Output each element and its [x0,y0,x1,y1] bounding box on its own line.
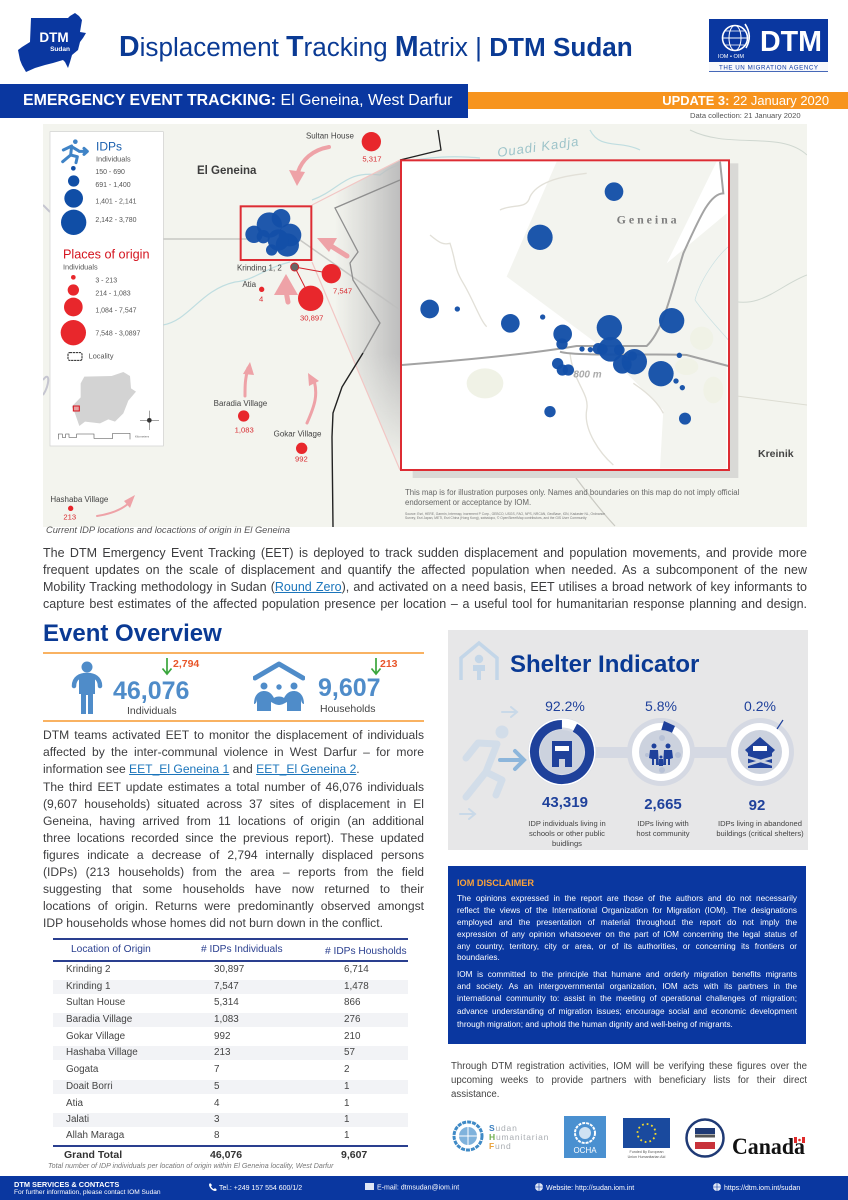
disclaimer text: advance understanding of migration issues; encourage social and economic development [457,1007,797,1016]
event overview body text: affected by the inter-communal violence in West Darfur – for more [43,745,424,759]
gauge: schools and public buildings [525,698,606,848]
table: location of origin [48,938,408,1170]
origin site markers: 992 [295,455,308,464]
gauge: host community: IDPs living with [637,819,689,828]
gauge: schools and public buildings: buidlings [552,839,582,848]
cluster of IDP sites with locator box [241,206,311,260]
figure: individuals: 46,076 [113,677,189,705]
table: location of origin: 4 [214,1098,220,1109]
event overview key figures: Individuals [127,705,177,717]
icon: household [253,662,305,711]
blue event banner [0,84,468,118]
event overview body text: DTM teams activated EET to monitor the displacement of individuals [43,728,424,742]
table: location of origin: Jalati [66,1114,89,1125]
logo: DTM Sudan country shape: Sudan [50,46,70,53]
footer DTM site: https://dtm.iom.int/sudan [724,1185,800,1192]
legend box: Kilometers [135,434,150,438]
gauge: host community: 5.8% [645,698,677,714]
closing note [451,1061,807,1100]
table: location of origin: # IDPs Individuals [201,944,283,955]
partner logos [452,1116,805,1159]
footer email: E-mail: dtmsudan@iom.int [377,1184,459,1192]
disclaimer text: international community to: assist in the meeting of operational challenges of migration; [457,994,797,1003]
table: location of origin: Grand Total [64,1149,122,1161]
logo: USAID seal [686,1120,724,1156]
footer telephone: Tel.: +249 157 554 600/1/2 [219,1185,302,1192]
logo: Canada wordmark: Canada [732,1134,805,1159]
table: location of origin: 213 [214,1047,230,1058]
map label: El Geneina: El Geneina [197,165,257,177]
map source credit: Survey, Esri Japan, METI, Esri China (Hong Kong), swisstopo, © OpenStreetMap contributors, and the GIS User Community [405,516,587,520]
table: location of origin: 1 [344,1114,350,1125]
legend box: 2,142 - 3,780 [95,217,137,224]
origin site markers: Atia [242,280,257,289]
legend box: 214 - 1,083 [95,291,131,298]
event overview body text: The third EET update estimates a total number of 46,076 individuals [43,780,424,794]
intro paragraph: capture best estimates of the affected population presence per location – a useful tool for humanitarian response planning and design. [43,597,807,611]
gauge: abandoned buildings [716,698,804,838]
locality boundary road [335,180,400,353]
legend box: IDPs [96,140,122,154]
intro paragraph: frequent updates on the scale of displacement and quantify the affected population when needed. As a subcomponent of the new [43,563,807,577]
event overview body text [43,728,424,930]
map source credit: Source: Esri, HERE, Garmin, Intermap, increment P Corp., GEBCO, USGS, FAO, NPS, NRCAN, GeoBase, IGN, Kadaster NL, Ordnance [405,512,605,516]
table: location of origin: Krinding 1 [66,981,110,992]
gauge: host community: host community [636,829,690,838]
icon: person [72,662,102,714]
table: location of origin: 5,314 [214,997,239,1008]
legend box: 1,401 - 2,141 [95,199,137,206]
icon: runner [63,139,87,163]
origin site markers: Gokar Village [274,430,322,439]
table: location of origin: 6,714 [344,964,369,975]
gauge: schools and public buildings: IDP individuals living in [528,819,606,828]
event overview body text: figures indicate a decrease of 2,794 internally displaced persons [43,848,424,862]
gauge: abandoned buildings: IDPs living in abandoned [718,819,802,828]
label: river Ouadi Kadja: Ouadi Kadja [496,134,580,160]
table: location of origin: 1 [344,1081,350,1092]
origin site markers: Hashaba Village [50,495,109,504]
footer contacts title: DTM SERVICES & CONTACTS [14,1180,119,1189]
legend box: 1,084 - 7,547 [95,308,137,315]
origin site markers: Sultan House [306,132,354,141]
table: location of origin: 210 [344,1031,360,1042]
origin site markers: 30,897 [300,314,323,323]
table: location of origin: Sultan House [66,997,125,1008]
event overview body text: suggesting that some households have now returned to their [43,882,424,896]
footer bar: For further information, please contact IOM Sudan [14,1189,161,1196]
table: location of origin: Gogata [66,1064,98,1075]
logo: IOM DTM: DTM [760,26,822,58]
origin site markers: Krinding 1, 2 [237,264,282,273]
footer website: Website: http://sudan.iom.int [546,1185,634,1192]
table: location of origin: 57 [344,1047,355,1058]
map disclaimer [405,488,740,507]
disclaimer text: boundaries. [457,953,500,962]
table: location of origin: 2 [344,1064,350,1075]
logo: IOM DTM: IOM • OIM [718,54,744,60]
closing note: upcoming weeks to provide partners with beneficiary lists for their direct [451,1075,807,1086]
legend box: Individuals [96,154,131,163]
logo: IOM DTM: THE UN MIGRATION AGENCY [719,64,818,72]
logo: Sudan Humanitarian Fund [454,1122,549,1151]
origin site markers: 1,083 [235,426,254,435]
orange update bar [468,92,848,109]
IDP site bubbles [420,182,691,425]
icon: down arrow [370,658,382,676]
origin site markers: 213 [63,512,76,521]
inset map: 800 m [573,370,602,381]
table: location of origin: 1,478 [344,981,369,992]
table: location of origin: Location of Origin [71,944,151,955]
change: households: 213 [380,658,398,670]
event overview body text: Geneina, having arrived from 11 locations of origin (an additional [43,814,424,828]
figure: households: 9,607 [318,674,381,702]
gauge: abandoned buildings: buildings (critical shelters) [716,829,804,838]
title: Displacement Tracking Matrix | DTM Sudan [119,31,633,63]
legend box: 7,548 - 3,0897 [95,330,140,337]
logo: DTM Sudan country shape [18,13,86,72]
event overview body text: locations of origin. Returns were predominantly observed amongst [43,899,424,913]
logo: Sudan Humanitarian Fund: Fund [489,1141,512,1151]
map base terrain [43,124,807,527]
table: location of origin: 5 [214,1081,220,1092]
logo: OCHA: OCHA [573,1146,597,1155]
footer bar [0,1176,848,1200]
table: location of origin: 1 [344,1130,350,1141]
table: location of origin: # IDPs Housholds [325,946,407,957]
disclaimer text: through migration; and uphold the human dignity and well-being of migrants. [457,1020,733,1029]
table: location of origin: 3 [214,1114,220,1125]
logo: EU humanitarian aid: Funded By European [630,1150,663,1154]
table: location of origin: 9,607 [341,1149,367,1161]
event overview body text: (9,607 households) situated across 37 sites of displacement in El [43,797,424,811]
origin site markers: 5,317 [362,155,382,164]
table: location of origin: Doait Borri [66,1081,113,1092]
logo: EU humanitarian aid: Union Humanitarian Aid [628,1155,665,1159]
event overview key figures: Households [320,703,375,715]
disclaimer text: employed and the presentation of material throughout the report do not imply the [457,918,797,927]
map panel [43,124,807,527]
map disclaimer: This map is for illustration purposes only. Names and boundaries on this map do not imply official [405,488,740,497]
gauge: schools and public buildings: 92.2% [545,698,585,714]
table: location of origin: 8 [214,1130,220,1141]
legend box: Places of origin [63,247,150,261]
table: location of origin: 46,076 [210,1149,242,1161]
footer website [535,1183,634,1192]
table: location of origin: Total number of IDP individuals per location of origin within El Geneina locality, West Darfur [48,1162,333,1170]
origin site markers [50,132,382,521]
disclaimer text: expression of any opinion whatsoever on the part of IOM concerning the legal status of [457,930,797,939]
intro paragraph [43,546,807,611]
disclaimer text: IOM is committed to the principle that humane and orderly migration benefits migrants [457,970,797,979]
update date: UPDATE 3: 22 January 2020 [662,93,829,108]
closing note: assistance. [451,1089,499,1100]
zoom connector to inset [312,160,400,470]
map source credit [405,512,605,520]
closing note: Through DTM registration activities, IOM will be verifying these figures over the [451,1061,807,1072]
disclaimer text: and society. As an intergovernmental organization, IOM acts with its partners in the [457,982,797,991]
event overview body text: information see EET_El Geneina 1 and EET_El Geneina 2. [43,762,360,776]
legend box: 150 - 690 [95,169,125,176]
legend box: 691 - 1,400 [95,182,131,189]
logo: IOM DTM [709,19,828,72]
table: location of origin: 7,547 [214,981,239,992]
disclaimer text [457,894,798,1029]
table: location of origin: 1 [344,1098,350,1109]
legend box: 3 - 213 [95,278,117,285]
heading: Shelter Indicator: Shelter Indicator [510,651,699,678]
icon: shelter house [461,643,497,680]
logo: Sudan Humanitarian Fund: Sudan [489,1123,518,1133]
table: location of origin: 866 [344,997,360,1008]
label: Kreinik: Kreinik [758,448,794,460]
event overview body text: IDP households whose homes did not burn down in the conflict. [43,916,383,930]
panel: IOM disclaimer [448,866,806,1044]
table: location of origin: Atia [66,1098,83,1109]
connector band [590,747,735,758]
inset map: Geneina [617,212,678,226]
panel: shelter indicator [448,630,808,850]
intro paragraph: The DTM Emergency Event Tracking (EET) is deployed to track sudden displacement and population movements, and provide more [43,546,807,560]
heading: Event Overview: Event Overview [43,620,222,647]
icon: faded runner with arrows [460,707,524,819]
gauge: schools and public buildings: 43,319 [542,794,588,811]
logo: Sudan Humanitarian Fund: Humanitarian [489,1132,549,1142]
banner title: EMERGENCY EVENT TRACKING: El Geneina, West Darfur [23,92,452,109]
disclaimer heading: IOM DISCLAIMER [457,878,534,888]
origin site markers: 4 [259,295,264,304]
icon: down arrow [162,658,172,676]
legend box [50,132,163,446]
origin arrows [97,147,347,516]
table: location of origin: 992 [214,1031,230,1042]
gauge: host community: 2,665 [644,796,682,813]
table: location of origin: 30,897 [214,964,244,975]
legend box: Individuals [63,262,98,271]
disclaimer text: any country, territory, city or area, or of its authorities, or concerning its frontiers or [457,942,797,951]
table: location of origin: Allah Maraga [66,1130,124,1141]
table: location of origin: 276 [344,1014,360,1025]
table: location of origin: 7 [214,1064,220,1075]
map caption: Current IDP locations and locactions of origin in El Geneina [46,525,290,535]
gauge: abandoned buildings: 92 [749,797,765,814]
change: individuals: 2,794 [173,658,199,670]
table: location of origin: Gokar Village [66,1031,125,1042]
event overview body text: (IDPs) (213 households) from the area – reports from the field [43,865,424,879]
gauge: host community [627,698,695,838]
intro paragraph: Mobility Tracking methodology in Sudan (Round Zero), and activated on a need basis, EET utilises a broad network of key informants to [43,580,807,594]
origin site markers: Baradia Village [214,399,268,408]
footer telephone [209,1183,302,1192]
event overview body text: three locations recorded since the previous report). These updated [43,831,424,845]
table: location of origin: Krinding 2 [66,964,110,975]
inset map [401,160,738,478]
logo: DTM Sudan country shape: DTM [39,30,69,45]
gauge: abandoned buildings: 0.2% [744,698,776,714]
disclaimer text: reflect the views of the International Organization for Migration (IOM). The designations [457,906,797,915]
event overview key figures [43,652,424,722]
gauge: schools and public buildings: schools or other public [529,829,605,838]
data collection date: Data collection: 21 January 2020 [690,111,801,120]
disclaimer text: The opinions expressed in the report are those of the authors and do not necessarily [457,894,797,903]
table: location of origin: Baradia Village [66,1014,132,1025]
table: location of origin: 1,083 [214,1014,239,1025]
footer DTM site [713,1183,800,1192]
logo: EU humanitarian aid [623,1118,670,1159]
mini map of Sudan [72,372,136,426]
legend box: Locality [89,352,114,361]
logo: OCHA [564,1116,606,1158]
table: location of origin: Hashaba Village [66,1047,138,1058]
map disclaimer: endorsement or acceptance by IOM. [405,498,531,507]
origin site markers: 7,547 [333,287,352,296]
